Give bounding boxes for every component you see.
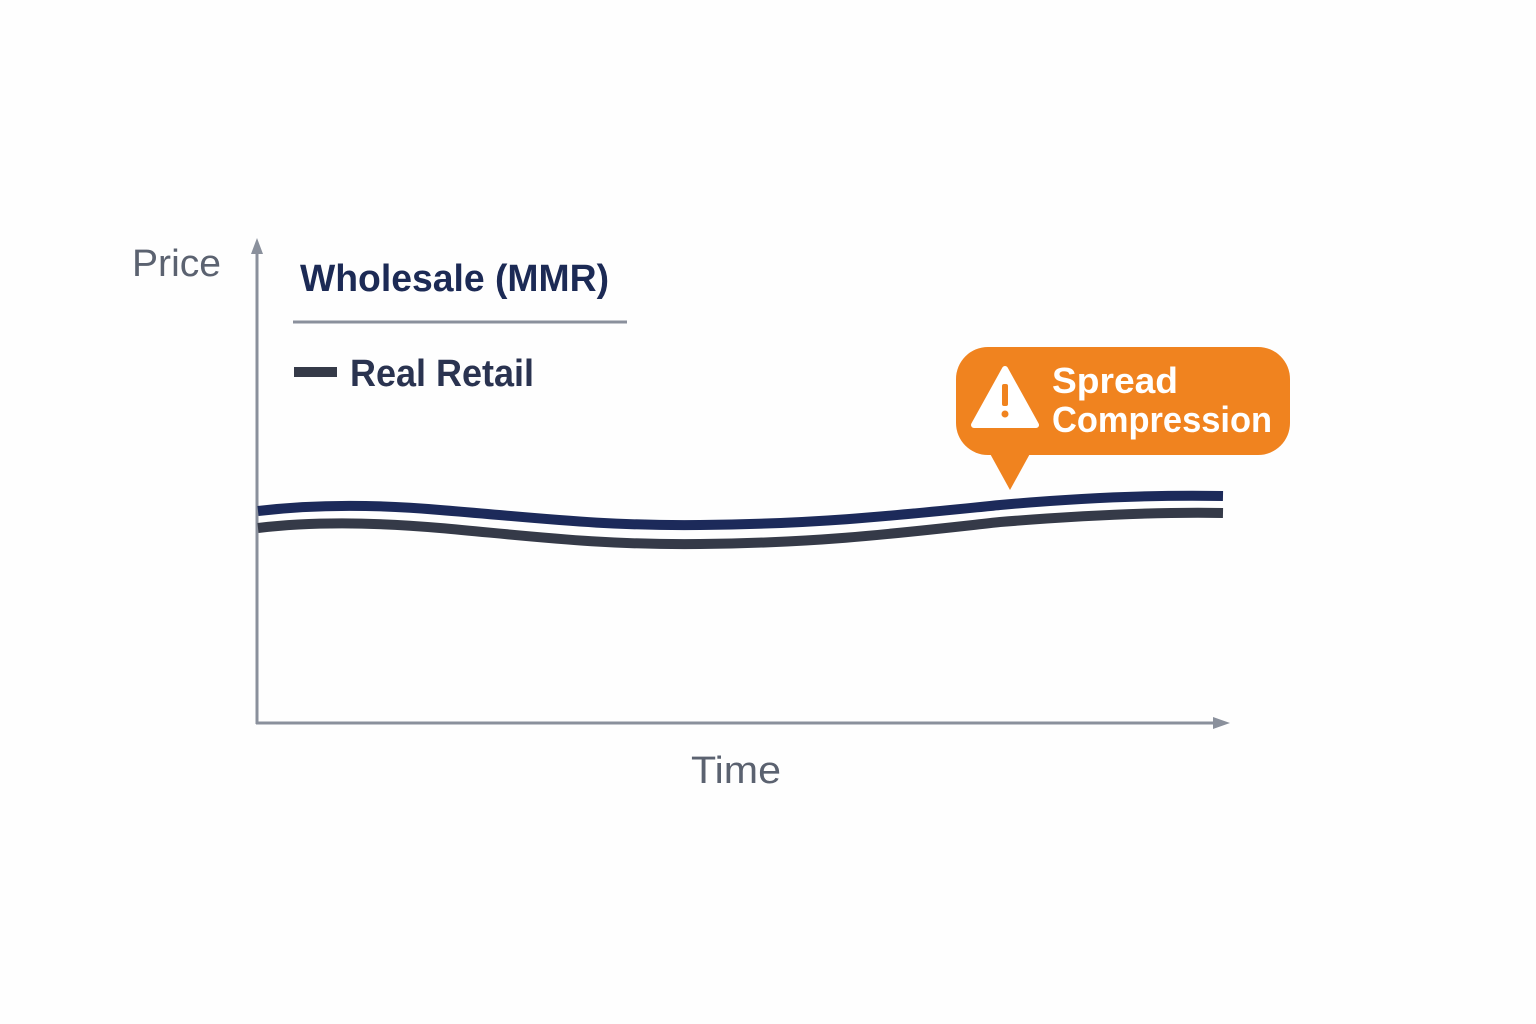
legend: real retail: Real Retail [350, 353, 534, 395]
y axis label: Price: Price [132, 243, 221, 285]
callout: spread compression: Spread [1052, 360, 1178, 401]
legend: wholesale: Wholesale (MMR) [300, 258, 609, 300]
y axis [251, 238, 263, 724]
x axis [256, 717, 1230, 729]
icon: warning [974, 369, 1036, 425]
legend [293, 258, 627, 395]
x axis label: Time: Time [691, 750, 781, 792]
line: real retail [258, 513, 1223, 544]
line: wholesale [258, 496, 1223, 525]
callout: spread compression [956, 347, 1290, 490]
callout: spread compression: Compression [1052, 399, 1272, 440]
